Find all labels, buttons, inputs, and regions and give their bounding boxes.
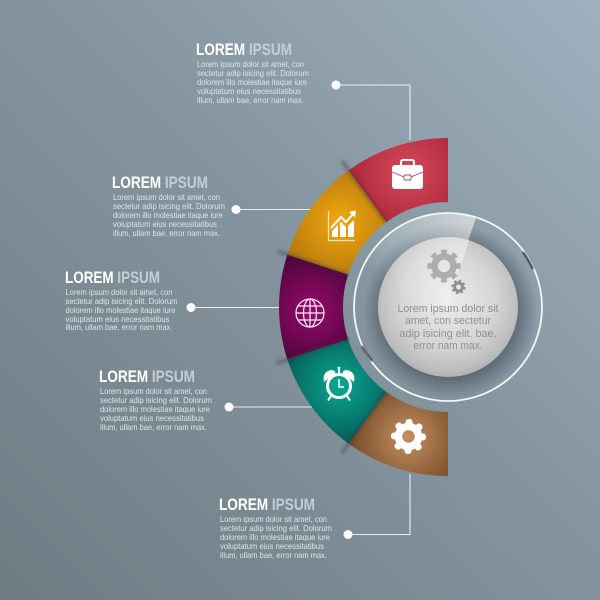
body: [197, 59, 309, 105]
body: voluptatum eius necessitatibus: [66, 314, 170, 324]
heading: LOREM IPSUM: [65, 268, 160, 287]
body: sectetur adip isicing elit. Dolorum: [100, 395, 212, 405]
connector: second: [232, 205, 312, 214]
body: dolorem illo molestiae itaque iure: [113, 210, 223, 220]
body: Lorem ipsum dolor sit amet, con: [113, 192, 220, 202]
body: sectetur adip isicing elit. Dolorum: [66, 296, 178, 306]
segment: red: [349, 138, 448, 222]
body: Lorem ipsum dolor sit amet, con: [220, 514, 327, 524]
body: [100, 386, 212, 432]
body: illum, ullam bae, error nam max.: [113, 228, 220, 238]
body: illum, ullam bae, error nam max.: [220, 550, 327, 560]
body: illum, ullam bae, error nam max.: [100, 422, 207, 432]
connector: fourth: [224, 402, 314, 412]
body: illum, ullam bae, error nam max.: [197, 95, 304, 105]
body: sectetur adip isicing elit. Dolorum: [220, 523, 332, 533]
text block: top: [196, 40, 309, 105]
center text: error nam max.: [414, 340, 482, 352]
body: voluptatum eius necessitatibus: [113, 219, 217, 229]
body: sectetur adip isicing elit. Dolorum: [113, 201, 225, 211]
body: [66, 287, 178, 332]
connector: bottom: [344, 474, 410, 539]
icon: growth chart: [328, 210, 356, 240]
heading: LOREM IPSUM: [196, 40, 292, 59]
segment: teal: [287, 339, 386, 444]
body: sectetur adip isicing elit. Dolorum: [197, 68, 309, 78]
body: voluptatum eius necessitatibus: [197, 86, 301, 96]
body: [220, 514, 332, 560]
body: Lorem ipsum dolor sit amet, con: [197, 59, 304, 69]
segment: orange: [287, 170, 386, 275]
center text: [398, 303, 498, 352]
segment: brown: [349, 392, 448, 476]
glass highlight on ring band: [372, 214, 476, 273]
text block: bottom: [219, 495, 332, 560]
icon: large gray gear: [430, 252, 458, 280]
segment divider shadows: [277, 161, 386, 453]
icon: small gray gear: [452, 281, 464, 293]
center text: amet, con sectetur: [405, 315, 491, 327]
icon: briefcase: [392, 160, 423, 189]
icon: alarm clock: [324, 367, 354, 400]
text block: second: [112, 173, 225, 238]
connector: middle: [186, 303, 282, 312]
body: Lorem ipsum dolor sit amet, con: [100, 386, 207, 396]
disc glass highlight: [396, 237, 469, 279]
central dial: [350, 200, 542, 401]
body: dolorem illo molestiae itaque iure: [66, 305, 176, 315]
text block: middle: [65, 268, 178, 332]
ring metallic glint: lower left: [362, 346, 372, 361]
center disc: [378, 237, 518, 377]
body: [113, 192, 225, 238]
text block: fourth: [99, 367, 212, 432]
center text: Lorem ipsum dolor sit: [398, 303, 498, 315]
body: Lorem ipsum dolor sit amet, con: [66, 287, 173, 297]
connector: top: [332, 80, 410, 140]
body: voluptatum eius necessitatibus: [100, 413, 204, 423]
icon: globe: [296, 299, 324, 327]
body: voluptatum eius necessitatibus: [220, 541, 324, 551]
body: dolorem illo molestiae itaque iure: [220, 532, 330, 542]
dial halo shadow: [354, 213, 542, 401]
body: dolorem illo molestiae itaque iure: [100, 404, 210, 414]
segment: purple: [279, 255, 348, 359]
body: dolorem illo molestiae itaque iure: [197, 77, 307, 87]
heading: LOREM IPSUM: [219, 495, 315, 514]
semicircle segments: [277, 138, 448, 476]
outer white ring: [354, 213, 542, 401]
heading: LOREM IPSUM: [112, 173, 208, 192]
heading: LOREM IPSUM: [99, 367, 195, 386]
ring metallic glint: upper right: [523, 252, 533, 269]
center text: adip isicing elit. bae,: [400, 328, 496, 340]
icon: white gear: [394, 422, 423, 451]
body: illum, ullam bae, error nam max.: [66, 322, 172, 332]
